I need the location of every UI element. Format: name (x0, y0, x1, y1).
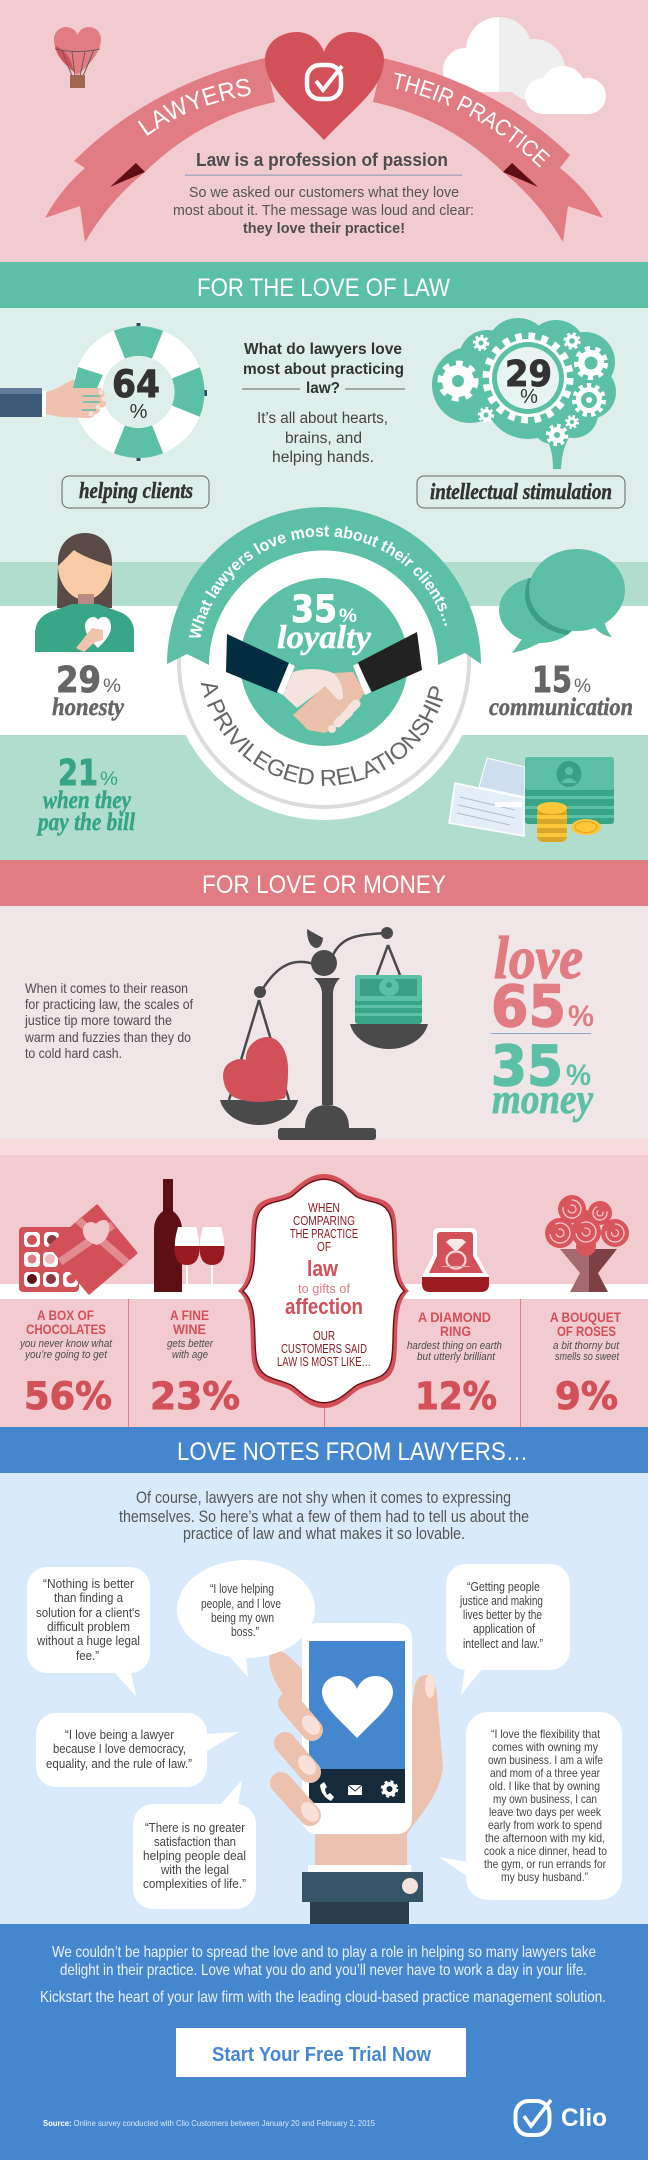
question text: brains, and (285, 430, 362, 447)
scales text: justice tip more toward the (24, 1012, 172, 1028)
stat: 35 percent money: % (566, 1059, 591, 1092)
speech bubble: nothing is better: fee.” (76, 1648, 99, 1663)
question text: helping hands. (272, 449, 374, 466)
speech bubble: flexibility of owning a business: the afternoon with my kid, (485, 1831, 605, 1845)
stat: love 65 percent (491, 925, 594, 1040)
stat: 15 percent communication: communication (489, 694, 633, 721)
speech bubble: flexibility of owning a business: own business. I am a wife (488, 1753, 603, 1767)
love notes intro text: themselves. So here’s what a few of them had to tell us about the (119, 1508, 529, 1526)
speech bubble: getting people justice: intellect and law.” (463, 1636, 543, 1651)
panel: love or money background (0, 906, 648, 1139)
icon: box of chocolates (19, 1206, 136, 1293)
icon: heart hot air balloon (54, 27, 101, 88)
speech bubble: nothing is better: without a huge legal (36, 1633, 140, 1648)
logo: Clio: Clio (561, 2104, 607, 2132)
panel: gifts of affection background (0, 1155, 648, 1427)
scales text: warm and fuzzies than they do (24, 1029, 191, 1045)
speech bubble: nothing is better: than finding a (54, 1590, 124, 1605)
badge: a privileged relationship (167, 507, 481, 820)
speech bubble: nothing is better: solution for a client's (36, 1605, 140, 1620)
label: intellectual stimulation (417, 476, 625, 508)
icon: speech bubbles (499, 549, 625, 653)
speech bubble: no greater satisfaction: “There is no greater (145, 1820, 246, 1835)
column: roses: OF ROSES (557, 1323, 616, 1339)
column: chocolates (19, 1307, 113, 1418)
speech bubble: flexibility of owning a business: comes with owning my (492, 1740, 598, 1754)
stat: 35 percent loyalty: loyalty (277, 620, 371, 656)
love notes intro text: practice of law and what makes it so lovable. (183, 1525, 465, 1543)
icon: woman with hand on heart (35, 533, 134, 652)
scales text: When it comes to their reason (25, 980, 188, 996)
center plaque: comparing law to gifts: COMPARING (293, 1213, 355, 1228)
label: helping clients: helping clients (79, 478, 193, 503)
label: intellectual stimulation: intellectual stimulation (430, 479, 612, 504)
stat: 29 percent honesty: honesty (52, 694, 125, 721)
stat: 64 percent: % (130, 401, 148, 423)
panel: love notes background (0, 1473, 648, 1924)
stat: 29 percent honesty (52, 660, 125, 721)
speech bubble: getting people justice: application of (473, 1621, 535, 1636)
column: roses: A BOUQUET (550, 1309, 621, 1325)
speech bubble: flexibility of owning a business: my busy husband.” (501, 1870, 588, 1884)
column: chocolates: CHOCOLATES (26, 1321, 106, 1337)
icon: wine bottle and glasses (154, 1179, 225, 1292)
column: roses: 9% (555, 1375, 618, 1418)
stat: 35 percent loyalty: 35 (291, 588, 337, 631)
stat: 29 percent honesty: % (103, 676, 121, 697)
stat: 21 percent when they pay the bill: pay the bill (36, 809, 135, 836)
speech bubble: getting people justice: “Getting people (467, 1579, 540, 1594)
center plaque: comparing law to gifts: OF (317, 1239, 331, 1254)
stat: 64 percent (112, 363, 160, 423)
stat: 15 percent communication (489, 660, 633, 721)
center plaque: comparing law to gifts: affection (285, 1294, 363, 1319)
banner ribbon: THEIR PRACTICE (394, 72, 550, 168)
scales text: to cold hard cash. (25, 1045, 122, 1061)
stat: 15 percent communication: % (574, 676, 591, 697)
column: roses: a bit thorny but (553, 1340, 620, 1352)
call to action button: Start Your Free Trial Now (212, 2044, 431, 2066)
speech bubble: I love being a lawyer: because I love democracy, (53, 1741, 186, 1756)
icon: handshake (226, 632, 422, 733)
section header: for love or money (0, 860, 648, 906)
badge: a privileged relationship: What lawyers love most about their clients… (188, 526, 448, 638)
center plaque: comparing law to gifts: LAW IS MOST LIKE… (277, 1354, 371, 1369)
speech bubble: no greater satisfaction: satisfaction than (154, 1834, 236, 1849)
icon: scales of justice with heart and money (220, 927, 428, 1140)
column: wine (150, 1307, 240, 1418)
speech bubble: flexibility of owning a business: early from work to spend (488, 1818, 602, 1832)
call to action button (176, 2028, 466, 2077)
intro heading: Law is a profession of passion (196, 150, 448, 170)
logo: Clio (516, 2100, 607, 2135)
question text: most about practicing (243, 361, 404, 378)
love notes intro text: Of course, lawyers are not shy when it comes to expressing (136, 1489, 511, 1507)
speech bubble: flexibility of owning a business: “I love the flexibility that (491, 1727, 601, 1741)
stat: love 65 percent: 65 (491, 974, 566, 1040)
panel: footer background (0, 1924, 648, 2160)
column: chocolates: you’re going to get (24, 1349, 108, 1361)
stat: 35 percent money (491, 1034, 593, 1123)
background bands (0, 562, 648, 860)
intro text (173, 185, 474, 237)
scales text (24, 980, 193, 1061)
speech bubble: I love being a lawyer: equality, and the rule of law.” (46, 1756, 192, 1771)
column: wine: 23% (150, 1375, 240, 1418)
icon: hand holding smartphone (269, 1623, 443, 1924)
icon: bouquet of roses (545, 1195, 629, 1292)
speech bubble: no greater satisfaction: helping people deal (143, 1848, 246, 1863)
column: roses (550, 1309, 621, 1418)
speech bubble: getting people justice: justice and making (459, 1593, 543, 1608)
column: wine: gets better (167, 1338, 214, 1350)
speech bubble: no greater satisfaction: complexities of life.” (143, 1876, 246, 1891)
intro text: most about it. The message was loud and clear: (173, 203, 474, 219)
icon: life ring with hand (0, 323, 207, 461)
icon: brain with gears (432, 318, 616, 469)
column: diamond ring: hardest thing on earth (407, 1340, 502, 1352)
stat: love 65 percent: % (568, 1000, 594, 1033)
speech bubble: I love being a lawyer (36, 1713, 239, 1787)
stat: 35 percent money: 35 (491, 1034, 563, 1098)
center plaque: comparing law to gifts: law (307, 1256, 339, 1281)
column: roses: smells so sweet (555, 1351, 620, 1363)
section header: for the love of law: FOR THE LOVE OF LAW (197, 274, 450, 302)
stat: 29 percent honesty: 29 (56, 660, 101, 701)
column: chocolates: 56% (24, 1375, 112, 1418)
stat: 35 percent money: money (492, 1077, 593, 1123)
panel: header background (0, 0, 648, 262)
icon: clouds (443, 17, 606, 114)
column: wine: A FINE (170, 1307, 209, 1323)
speech bubble: flexibility of owning a business: cook a nice dinner, head to (484, 1844, 607, 1858)
column: wine: with age (172, 1349, 208, 1361)
column: chocolates: A BOX OF (37, 1307, 94, 1323)
section header: love notes from lawyers (0, 1427, 648, 1473)
stat: 21 percent when they pay the bill: % (100, 769, 118, 790)
label: helping clients (62, 476, 209, 508)
speech bubble: nothing is better (27, 1567, 150, 1696)
center plaque: comparing law to gifts (238, 1174, 409, 1408)
speech bubble: flexibility of owning a business: old. I like that by owning (489, 1779, 600, 1793)
closing text (40, 1944, 606, 2006)
stat: 21 percent when they pay the bill: 21 (58, 753, 98, 794)
speech bubble: no greater satisfaction (133, 1780, 256, 1909)
speech bubble: flexibility of owning a business: and mom of a three year (490, 1766, 600, 1780)
speech bubble: flexibility of owning a business: my own business, I can (493, 1792, 597, 1806)
column: diamond ring: 12% (415, 1375, 497, 1418)
section header: for the love of law (0, 262, 648, 308)
center plaque: comparing law to gifts: CUSTOMERS SAID (281, 1341, 367, 1356)
stat: 15 percent communication: 15 (532, 660, 572, 701)
banner ribbon: LAWYERS (138, 78, 251, 136)
speech bubble: getting people justice: lives better by the (463, 1607, 542, 1622)
speech bubble: no greater satisfaction: with the legal (160, 1862, 229, 1877)
icon: diamond ring box (422, 1228, 489, 1292)
center plaque: comparing law to gifts: THE PRACTICE (290, 1226, 358, 1241)
question text: It’s all about hearts, (257, 410, 388, 427)
stat: 21 percent when they pay the bill: when they (43, 787, 132, 814)
column: diamond ring: but utterly brilliant (417, 1351, 496, 1363)
speech bubble: nothing is better: “Nothing is better (43, 1576, 135, 1591)
stat: 29 percent: 29 (505, 354, 552, 395)
speech bubble: flexibility of owning a business: the gym, or run errands for (484, 1857, 606, 1871)
panel: love of law background (0, 308, 648, 860)
speech bubble: flexibility of owning a business: leave two days per week (489, 1805, 602, 1819)
speech bubble: nothing is better: difficult problem (47, 1619, 130, 1634)
question text: What do lawyers love (244, 341, 402, 358)
column: chocolates: you never know what (19, 1338, 113, 1350)
question text: law? (306, 380, 340, 397)
speech bubble: I love helping people: boss.” (231, 1624, 259, 1639)
section header: love notes from lawyers: LOVE NOTES FROM LAWYERS… (177, 1438, 528, 1466)
speech bubble: I love helping people (177, 1560, 315, 1677)
icon: heart with check mark (265, 32, 384, 140)
speech bubble: I love helping people: people, and I love (201, 1596, 281, 1611)
speech bubble: I love helping people: “I love helping (210, 1581, 274, 1596)
center plaque: comparing law to gifts: to gifts of (298, 1281, 350, 1296)
stat: 29 percent: % (520, 386, 538, 408)
speech bubble: I love being a lawyer: “I love being a lawyer (65, 1727, 175, 1742)
love notes intro text (119, 1489, 529, 1543)
stat: 21 percent when they pay the bill (36, 753, 135, 836)
source note: Source: Online survey conducted with Clio Customers between January 20 and February 2, 2015 (43, 2119, 376, 2128)
stat: 35 percent loyalty: % (339, 606, 357, 627)
section header: for love or money: FOR LOVE OR MONEY (202, 871, 446, 899)
icon: cheques, cash and coins (449, 757, 614, 842)
center plaque: comparing law to gifts: WHEN (308, 1200, 340, 1215)
column: wine: WINE (173, 1321, 206, 1337)
column: diamond ring: RING (440, 1323, 471, 1339)
badge: a privileged relationship: A PRIVILEGED RELATIONSHIP (200, 682, 443, 786)
question text (242, 341, 405, 466)
speech bubble: flexibility of owning a business (439, 1712, 622, 1900)
column: diamond ring: A DIAMOND (418, 1309, 491, 1325)
intro text: So we asked our customers what they love (189, 185, 459, 201)
stat: 64 percent: 64 (112, 363, 160, 406)
stat: 35 percent loyalty (277, 588, 371, 656)
center plaque: comparing law to gifts: OUR (313, 1328, 335, 1343)
banner ribbon (45, 58, 603, 242)
scales text: for practicing law, the scales of (25, 996, 193, 1012)
speech bubble: getting people justice (446, 1564, 570, 1695)
speech bubble: I love helping people: being my own (211, 1610, 274, 1625)
intro text: they love their practice! (243, 221, 405, 237)
stat: love 65 percent: love (494, 925, 583, 991)
column: diamond ring (407, 1309, 502, 1418)
